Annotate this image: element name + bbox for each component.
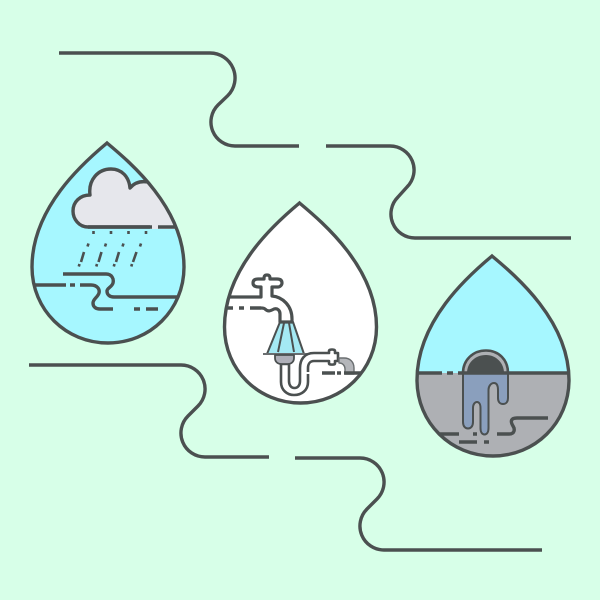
river and ground lines xyxy=(30,274,180,309)
panel: faucet drop xyxy=(222,203,376,403)
connector line: bottom left xyxy=(29,365,269,457)
wall line xyxy=(322,371,364,375)
ground xyxy=(418,373,568,454)
drain cup xyxy=(275,355,294,364)
icon: spray of water xyxy=(267,322,304,354)
sludge xyxy=(463,373,508,434)
panel: sewer drop xyxy=(410,256,575,463)
rain xyxy=(79,231,146,266)
drop outline xyxy=(417,256,569,456)
grey pipe elbow xyxy=(339,358,354,374)
panel: rain drop xyxy=(30,143,190,343)
drop outline xyxy=(224,203,376,403)
basin line xyxy=(263,353,308,355)
connector line: bottom right xyxy=(295,458,542,550)
connector line: top right xyxy=(326,146,571,238)
icon: cloud xyxy=(73,169,190,229)
icon: sewer outlet xyxy=(463,350,508,373)
connector line: top left xyxy=(59,53,299,146)
drop outline xyxy=(32,143,184,343)
drain pipe xyxy=(281,350,338,395)
icon: faucet xyxy=(222,275,292,322)
ground lines xyxy=(410,373,575,442)
